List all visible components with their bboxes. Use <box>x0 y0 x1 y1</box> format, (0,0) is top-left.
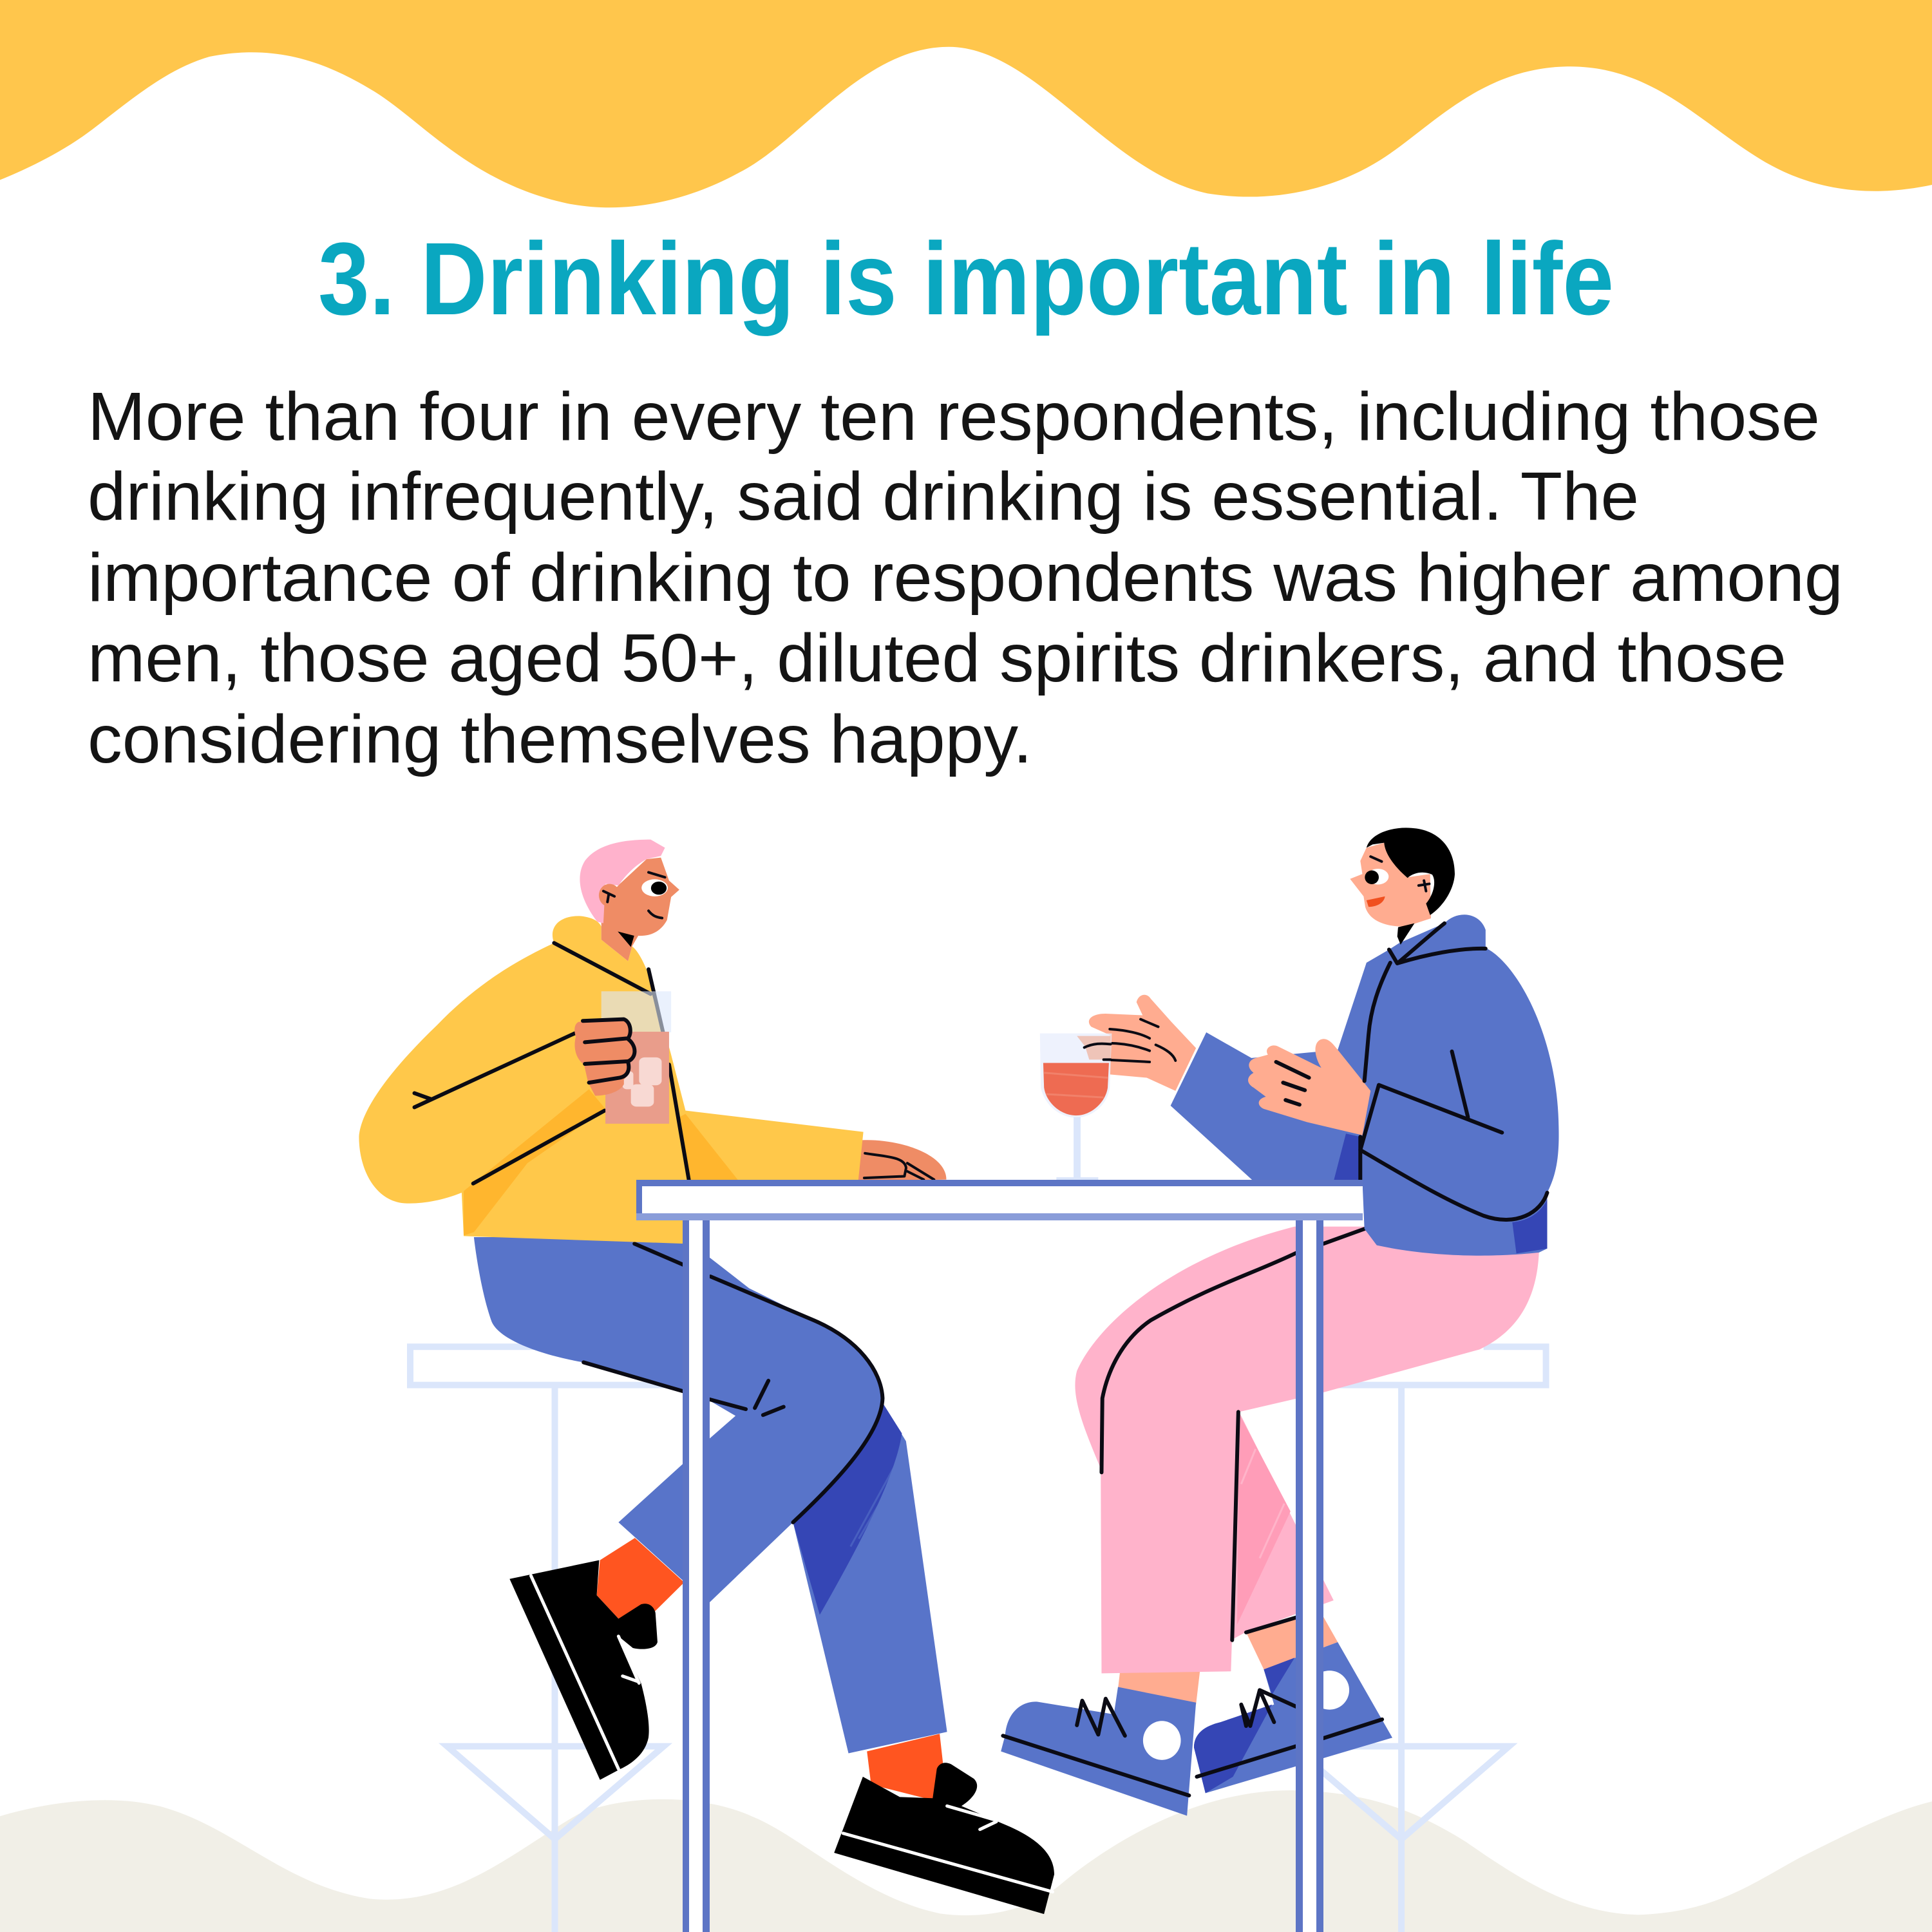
left person upper body <box>359 840 946 1244</box>
illustration: two people at a table <box>359 828 1559 1932</box>
left table leg <box>683 1217 710 1932</box>
front ankle <box>1118 1669 1200 1705</box>
body paragraph: importance of drinking to respondents was higher among <box>88 540 1843 616</box>
right bar stool <box>1320 1347 1546 1932</box>
back leg <box>1231 1412 1334 1640</box>
front hand <box>1248 1039 1370 1135</box>
back hand <box>1089 995 1196 1091</box>
socks <box>597 1538 684 1619</box>
bottom beige wave <box>0 1790 1932 1932</box>
left bar stool <box>410 1347 694 1932</box>
right person legs and shoes <box>1001 1227 1539 1815</box>
title: 3. Drinking is important in life <box>318 221 1614 336</box>
body paragraph: drinking infrequently, said drinking is essential. The <box>88 459 1639 535</box>
drink glass with ice <box>601 991 671 1124</box>
yellow hoodie <box>359 916 864 1244</box>
planted shoe <box>834 1763 1054 1914</box>
left person legs and shoes <box>474 1237 1054 1914</box>
body paragraph: considering themselves happy. <box>88 701 1032 777</box>
wine glass <box>1040 1034 1112 1180</box>
top yellow wave banner <box>0 0 1932 207</box>
head: black hair and face <box>1350 828 1455 945</box>
hoodie seams <box>1360 923 1486 1180</box>
body paragraph <box>88 379 1843 777</box>
thigh and knee <box>474 1237 882 1603</box>
body paragraph: More than four in every ten respondents, including those <box>88 379 1820 455</box>
pink trousers <box>1075 1227 1539 1673</box>
fist holding glass <box>574 1019 635 1096</box>
head: pink hair and face <box>580 840 679 961</box>
body paragraph: men, those aged 50+, diluted spirits drinkers, and those <box>88 620 1786 696</box>
blue hoodie <box>1171 914 1559 1256</box>
back shoe <box>1194 1642 1392 1793</box>
resting hand <box>856 1140 946 1181</box>
table top <box>636 1180 1363 1220</box>
sleeve cuff lines <box>1360 1085 1547 1220</box>
right person upper body <box>1040 828 1559 1256</box>
table <box>636 1180 1363 1932</box>
front shoe <box>1001 1687 1196 1815</box>
raised shoe <box>509 1560 658 1780</box>
back lower leg <box>793 1404 947 1754</box>
right table leg <box>1296 1217 1323 1932</box>
